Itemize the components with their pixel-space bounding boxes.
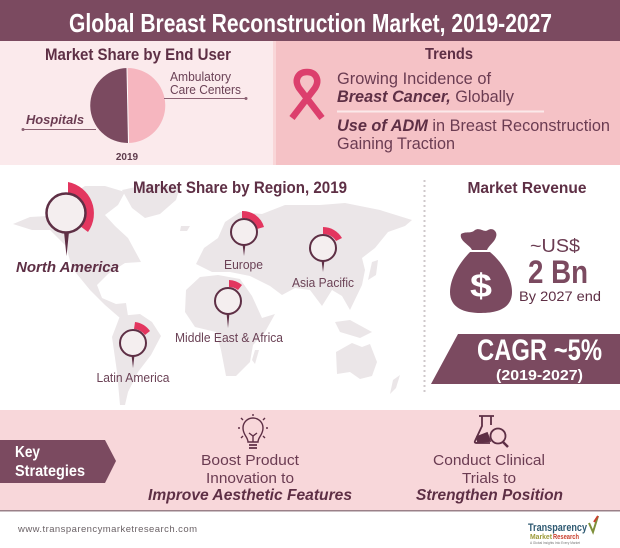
label: north america: North America	[16, 259, 119, 276]
logo: transparency market research: Market	[530, 534, 553, 541]
trend 2 text	[337, 117, 610, 153]
world map background	[13, 184, 412, 405]
pie year label: 2019	[116, 152, 139, 163]
strategy 2 text: Trials to	[462, 470, 516, 487]
header banner	[0, 0, 620, 41]
label: hospitals: Hospitals	[26, 113, 84, 127]
revenue value	[519, 236, 601, 304]
label: ambulatory care centers: Ambulatory	[170, 70, 232, 84]
logo: transparency market research: Research	[553, 534, 579, 541]
pin: latin america	[120, 322, 150, 368]
heading: end user: Market Share by End User	[45, 46, 232, 64]
icon: money bag	[450, 229, 512, 313]
trend 1 text: Growing Incidence of	[337, 70, 491, 88]
pin: middle east and africa	[215, 280, 242, 328]
trend 1 text	[337, 70, 515, 106]
label: ambulatory care centers: Care Centers	[170, 83, 241, 97]
label: latin america: Latin America	[96, 371, 170, 385]
strategy 2 text	[416, 452, 563, 504]
icon: ribbon	[292, 72, 322, 118]
icon: money bag: $	[470, 267, 492, 304]
revenue value: ~US$	[530, 236, 580, 256]
trend 2 text: Gaining Traction	[337, 135, 455, 153]
strategy 1 text: Innovation to	[206, 470, 294, 487]
label: ambulatory care centers	[164, 70, 248, 100]
panel: trends	[273, 41, 620, 165]
key strategies tag: Strategies	[15, 463, 85, 480]
panel: key strategies	[0, 410, 620, 512]
logo: transparency market research	[528, 516, 598, 545]
label: middle east and africa: Middle East & Africa	[175, 331, 283, 345]
heading: market share by region: Market Share by Region, 2019	[133, 179, 347, 197]
trend 2 text: Use of ADM in Breast Reconstruction	[337, 117, 610, 135]
strategy 1 text	[148, 452, 352, 504]
icon: flask and magnifier	[475, 416, 508, 447]
pin: europe	[231, 211, 264, 256]
heading: trends: Trends	[425, 46, 473, 63]
pie chart	[90, 68, 165, 143]
logo: transparency market research: Transparency	[528, 522, 588, 534]
CAGR banner: (2019-2027)	[496, 367, 583, 384]
key strategies tag: Key	[15, 444, 40, 461]
revenue value: By 2027 end	[519, 288, 601, 304]
trend 1 text: Breast Cancer, Globally	[337, 88, 515, 106]
panel: market share by end user	[0, 41, 273, 165]
strategy 2 text: Conduct Clinical	[433, 452, 545, 469]
pin: north america	[46, 182, 94, 256]
label: europe: Europe	[224, 258, 263, 272]
website url: www.transparencymarketresearch.com	[17, 524, 197, 535]
strategy 2 text: Strengthen Position	[416, 487, 563, 504]
heading: market revenue: Market Revenue	[468, 180, 587, 197]
key strategies tag	[0, 440, 116, 483]
strategy 1 text: Boost Product	[201, 452, 300, 469]
icon: light bulb	[238, 414, 268, 448]
strategy 1 text: Improve Aesthetic Features	[148, 487, 352, 504]
label: asia pacific: Asia Pacific	[292, 276, 354, 290]
revenue value: 2 Bn	[528, 254, 588, 290]
label: hospitals	[22, 113, 96, 131]
pin: asia pacific	[310, 227, 342, 272]
CAGR banner	[431, 334, 620, 384]
logo: transparency market research: A Global Insights Into Every Market	[530, 541, 580, 545]
